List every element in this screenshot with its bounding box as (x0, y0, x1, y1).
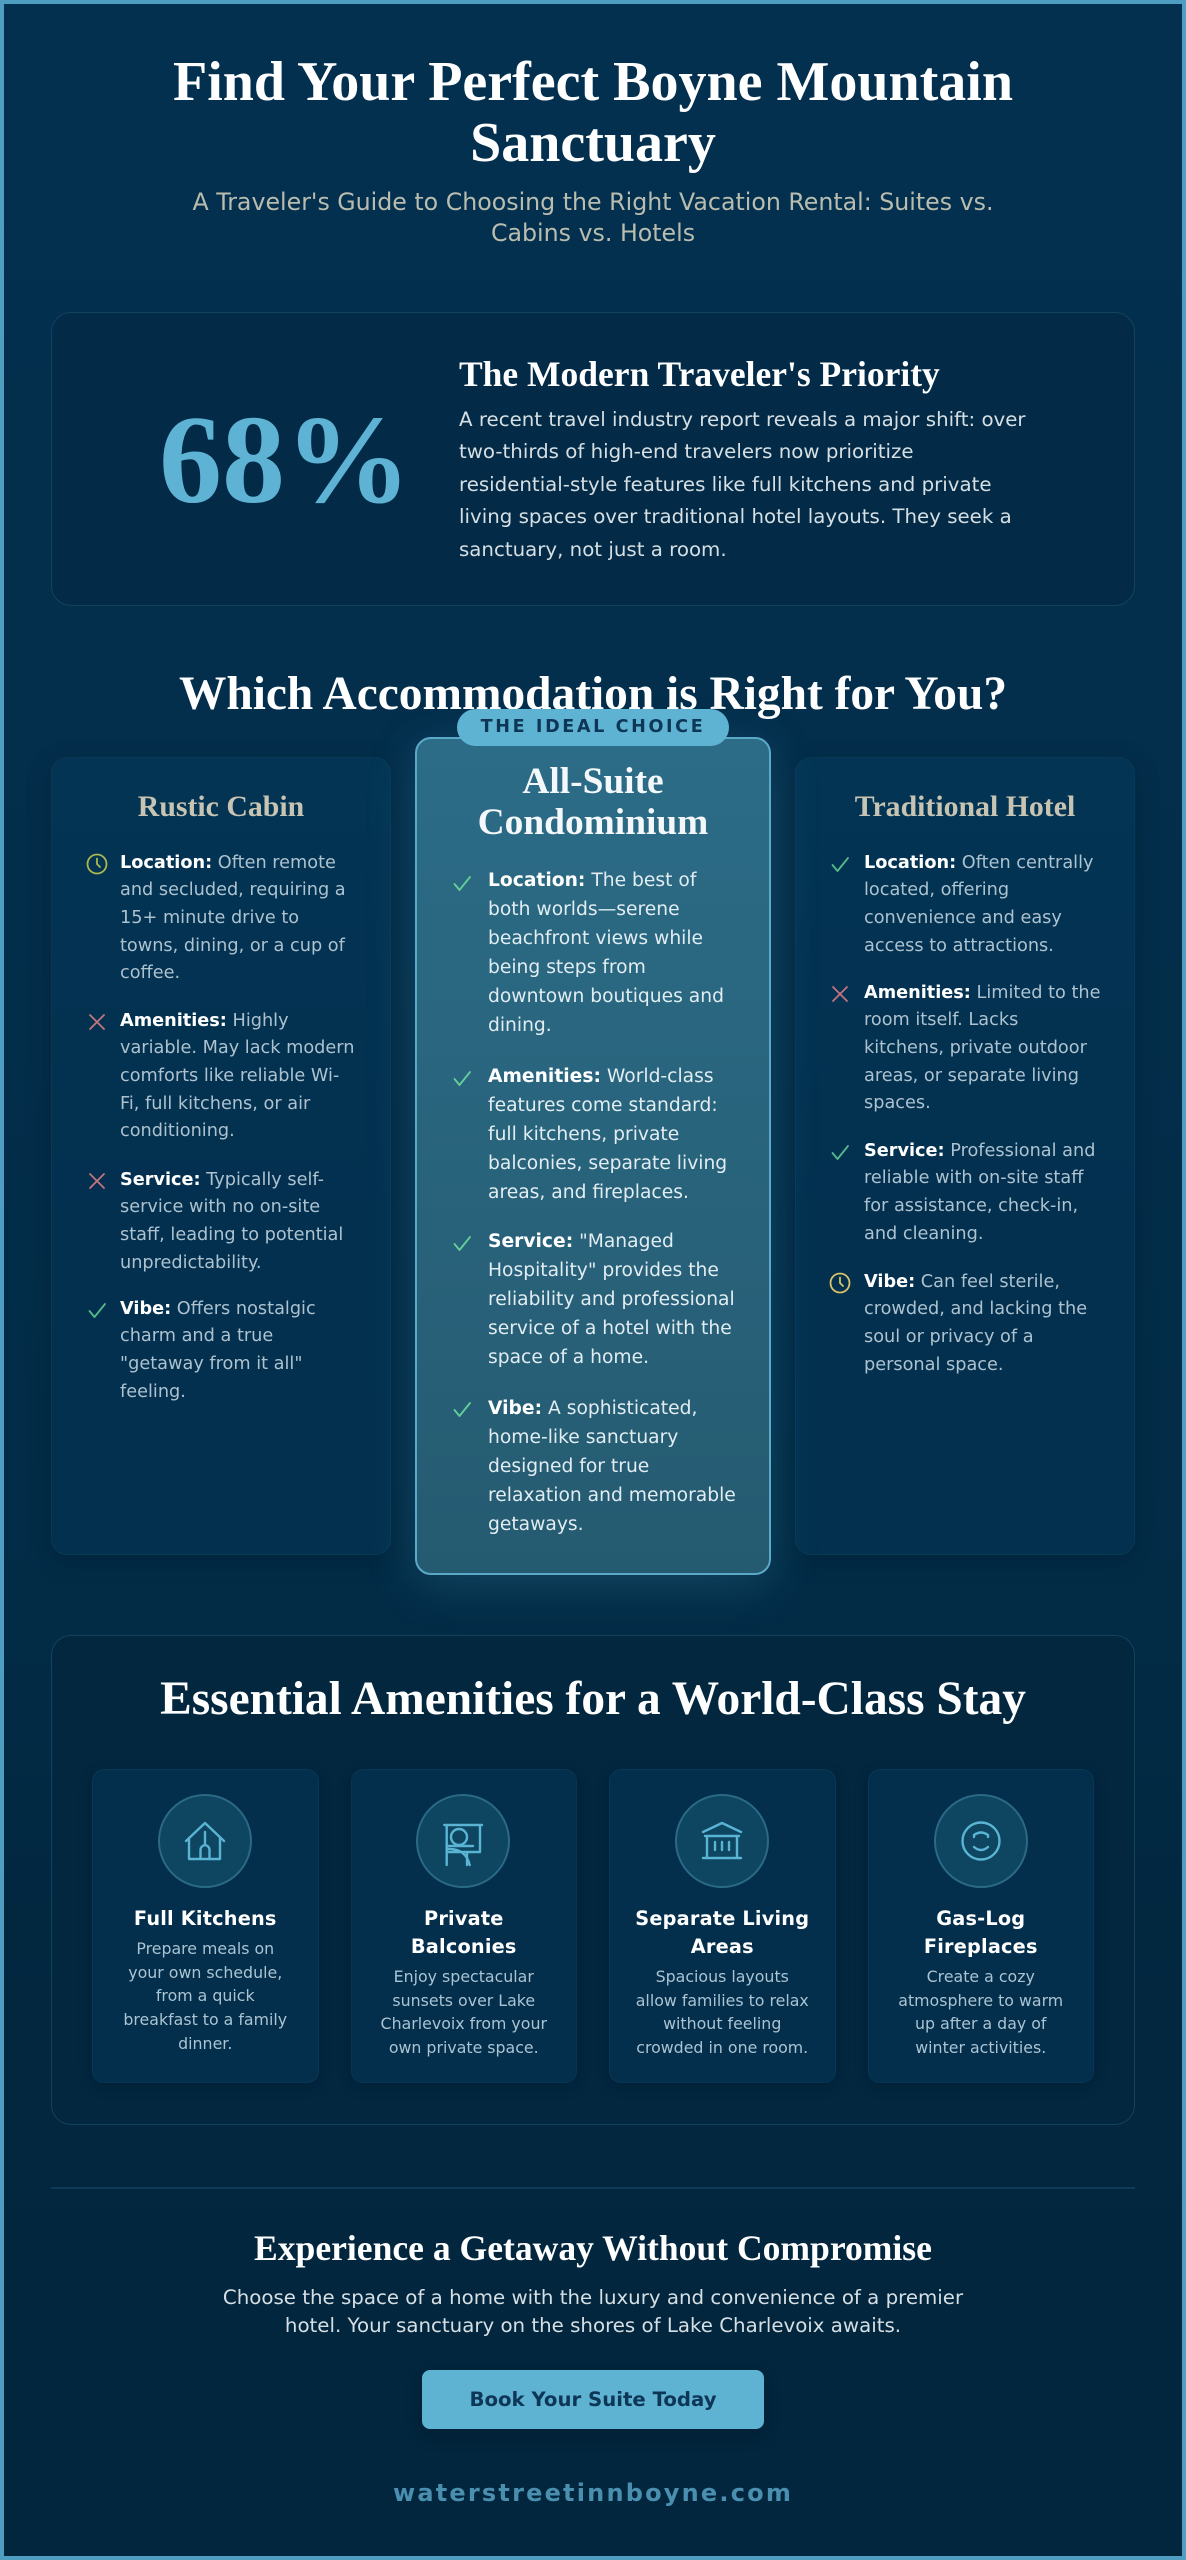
condominium vibe: getaways. (488, 1514, 584, 1535)
closing text (223, 2286, 964, 2337)
closing text: Choose the space of a home with the luxury and convenience of a premier (223, 2286, 963, 2309)
icon: fireplace (961, 1821, 1001, 1861)
stat text: two-thirds of high-end travelers now prioritize (459, 440, 914, 463)
hotel service: reliable with on-site staff (864, 1168, 1083, 1188)
cabin location (120, 852, 346, 983)
hotel vibe (864, 1272, 1087, 1375)
gas-log fireplaces title: Fireplaces (924, 1934, 1038, 1958)
private balconies text: own private space. (389, 2038, 539, 2057)
cabin location: 15+ minute drive to (120, 908, 299, 928)
full kitchens text: from a quick (156, 1986, 255, 2005)
condominium amenities: areas, and fireplaces. (488, 1182, 689, 1203)
condominium location: dining. (488, 1015, 552, 1036)
hotel location (864, 852, 1093, 956)
icon: clock (86, 854, 108, 874)
icon: building (702, 1822, 742, 1860)
condominium vibe: Vibe: A sophisticated, (488, 1398, 697, 1418)
cabin amenities: conditioning. (120, 1121, 235, 1141)
badge: the ideal choice: THE IDEAL CHOICE (481, 717, 705, 737)
condominium service (488, 1231, 735, 1368)
condominium vibe: home-like sanctuary (488, 1427, 678, 1448)
condominium location: being steps from (488, 957, 646, 978)
stat heading: The Modern Traveler's Priority (459, 354, 940, 394)
icon circle: private balconies (416, 1794, 510, 1888)
icon: check (454, 1236, 471, 1251)
separate living areas title: Areas (691, 1934, 754, 1958)
stat text: living spaces over traditional hotel layouts. They seek a (459, 505, 1012, 528)
gas-log fireplaces title: Gas-Log (936, 1907, 1025, 1930)
cabin vibe: Vibe: Offers nostalgic (120, 1298, 316, 1318)
cabin amenities: Fi, full kitchens, or air (120, 1094, 310, 1114)
full kitchens text: breakfast to a family (123, 2010, 287, 2029)
gas-log fireplaces text: Create a cozy (927, 1967, 1035, 1986)
cabin amenities: Amenities: Highly (120, 1010, 289, 1030)
condominium title (478, 761, 708, 843)
condominium location: downtown boutiques and (488, 986, 724, 1007)
cabin vibe: feeling. (120, 1382, 186, 1402)
gas-log fireplaces text: up after a day of (915, 2014, 1046, 2033)
panel: all-suite condominium (415, 737, 771, 1575)
cabin location: coffee. (120, 963, 180, 983)
icon: check (454, 876, 471, 891)
title: Find Your Perfect Boyne Mountain (173, 51, 1013, 113)
condominium location: Location: The best of (488, 870, 696, 891)
panel: amenities background (51, 1635, 1135, 2125)
amenity: private balconies (350, 1769, 577, 2083)
cabin service: staff, leading to potential (120, 1225, 343, 1245)
icon circle: full kitchens (158, 1794, 252, 1888)
subtitle (192, 188, 994, 247)
condominium service: reliability and professional (488, 1289, 735, 1310)
icon: check (832, 1145, 849, 1160)
private balconies text: Charlevoix from your (381, 2014, 547, 2033)
private balconies title (411, 1907, 517, 1958)
full kitchens text: Prepare meals on (136, 1939, 274, 1958)
condominium amenities: features come standard: (488, 1095, 718, 1116)
separate living areas text: without feeling (663, 2014, 781, 2033)
cabin service: Service: Typically self- (120, 1170, 324, 1190)
cabin service: unpredictability. (120, 1253, 262, 1273)
cabin amenities: comforts like reliable Wi- (120, 1066, 339, 1086)
cabin location: and secluded, requiring a (120, 880, 346, 900)
condominium location (488, 870, 724, 1036)
badge: the ideal choice (457, 709, 729, 746)
icon: check (454, 1071, 471, 1086)
full kitchens title: Full Kitchens (134, 1907, 277, 1930)
private balconies title: Private (424, 1907, 504, 1930)
panel: traditional hotel (795, 757, 1135, 1555)
hotel vibe: Vibe: Can feel sterile, (864, 1272, 1060, 1292)
condominium vibe (488, 1398, 736, 1535)
icon: cross (89, 1173, 105, 1189)
icon circle: separate living areas (675, 1794, 769, 1888)
hotel location: Location: Often centrally (864, 852, 1093, 872)
stat text: residential-style features like full kitchens and private (459, 473, 992, 496)
separate living areas title (635, 1907, 809, 1958)
condominium location: both worlds—serene (488, 899, 680, 920)
cabin vibe (120, 1298, 316, 1402)
hotel service: and cleaning. (864, 1224, 983, 1244)
button (422, 2370, 764, 2429)
closing text: hotel. Your sanctuary on the shores of Lake Charlevoix awaits. (285, 2314, 901, 2337)
cabin location: Location: Often remote (120, 852, 336, 872)
hotel amenities: room itself. Lacks (864, 1010, 1018, 1030)
condominium amenities: Amenities: World-class (488, 1066, 714, 1086)
cabin location: towns, dining, or a cup of (120, 936, 345, 956)
gas-log fireplaces text: atmosphere to warm (898, 1991, 1063, 2010)
condominium service: Hospitality" provides the (488, 1260, 719, 1281)
subtitle: A Traveler's Guide to Choosing the Right Vacation Rental: Suites vs. (192, 188, 994, 216)
title (173, 51, 1013, 174)
cabin title: Rustic Cabin (138, 790, 304, 823)
hotel title: Traditional Hotel (855, 790, 1075, 823)
icon: cross (89, 1014, 105, 1030)
footer url: waterstreetinnboyne.com (393, 2479, 793, 2507)
hotel amenities: kitchens, private outdoor (864, 1038, 1087, 1058)
condominium amenities: full kitchens, private (488, 1124, 679, 1145)
condominium vibe: relaxation and memorable (488, 1485, 736, 1506)
condominium amenities: balconies, separate living (488, 1153, 727, 1174)
hotel location: access to attractions. (864, 936, 1054, 956)
condominium title: Condominium (478, 802, 708, 843)
condominium location: beachfront views while (488, 928, 703, 949)
cabin vibe: "getaway from it all" (120, 1354, 302, 1374)
private balconies text: Enjoy spectacular (394, 1967, 534, 1986)
button: Book Your Suite Today (469, 2388, 717, 2411)
separate living areas text: crowded in one room. (636, 2038, 808, 2057)
stat text: sanctuary, not just a room. (459, 538, 727, 561)
hotel amenities: areas, or separate living (864, 1066, 1079, 1086)
separate living areas title: Separate Living (635, 1907, 809, 1930)
icon: check (88, 1303, 106, 1318)
hotel amenities: spaces. (864, 1093, 931, 1113)
hotel amenities: Amenities: Limited to the (864, 982, 1100, 1002)
hotel service (864, 1140, 1095, 1244)
icon: balcony (443, 1824, 484, 1866)
private balconies text (381, 1967, 547, 2057)
separate living areas text: Spacious layouts (656, 1967, 789, 1986)
amenities heading: Essential Amenities for a World-Class Stay (160, 1673, 1026, 1725)
panel: rustic cabin (51, 757, 391, 1555)
stat text: A recent travel industry report reveals a major shift: over (459, 408, 1026, 431)
hotel location: located, offering (864, 880, 1009, 900)
cabin service: service with no on-site (120, 1197, 320, 1217)
cabin service (120, 1170, 343, 1273)
amenity: full kitchens (92, 1769, 318, 2083)
icon: check (832, 857, 849, 872)
full kitchens text: your own schedule, (128, 1963, 282, 1982)
amenity: separate living areas (609, 1769, 836, 2083)
separate living areas text (636, 1967, 809, 2057)
gas-log fireplaces text (898, 1967, 1063, 2057)
hotel vibe: soul or privacy of a (864, 1327, 1034, 1347)
title: Sanctuary (470, 112, 716, 174)
stat text (459, 408, 1026, 561)
condominium vibe: designed for true (488, 1456, 649, 1477)
hotel vibe: personal space. (864, 1355, 1004, 1375)
full kitchens text (123, 1939, 287, 2053)
hotel service: Service: Professional and (864, 1140, 1095, 1160)
cabin amenities (120, 1010, 354, 1141)
closing heading: Experience a Getaway Without Compromise (254, 2228, 932, 2268)
amenity: gas-log fireplaces (868, 1769, 1094, 2083)
separate living areas text: allow families to relax (636, 1991, 809, 2010)
icon: clock (830, 1272, 850, 1294)
divider (51, 2187, 1135, 2189)
condominium title: All-Suite (522, 761, 664, 802)
full kitchens text: dinner. (178, 2034, 232, 2053)
hotel service: for assistance, check-in, (864, 1196, 1078, 1216)
icon: cross (832, 986, 848, 1002)
hotel location: convenience and easy (864, 908, 1062, 928)
panel: stat (51, 312, 1135, 606)
big number: 68% (159, 391, 411, 530)
icon circle: gas-log fireplaces (934, 1794, 1028, 1888)
gas-log fireplaces text: winter activities. (915, 2038, 1046, 2057)
private balconies text: sunsets over Lake (392, 1991, 535, 2010)
hotel vibe: crowded, and lacking the (864, 1299, 1087, 1319)
hotel amenities (864, 982, 1100, 1113)
private balconies title: Balconies (411, 1934, 517, 1958)
gas-log fireplaces title (924, 1907, 1038, 1958)
condominium service: service of a hotel with the (488, 1318, 732, 1339)
condominium service: space of a home. (488, 1347, 649, 1368)
cabin amenities: variable. May lack modern (120, 1038, 354, 1058)
icon: check (454, 1402, 471, 1417)
condominium amenities (488, 1066, 727, 1203)
section heading: Which Accommodation is Right for You? (179, 668, 1007, 720)
condominium service: Service: "Managed (488, 1231, 674, 1252)
subtitle: Cabins vs. Hotels (491, 219, 695, 247)
cabin vibe: charm and a true (120, 1326, 273, 1346)
icon: house (184, 1822, 226, 1860)
